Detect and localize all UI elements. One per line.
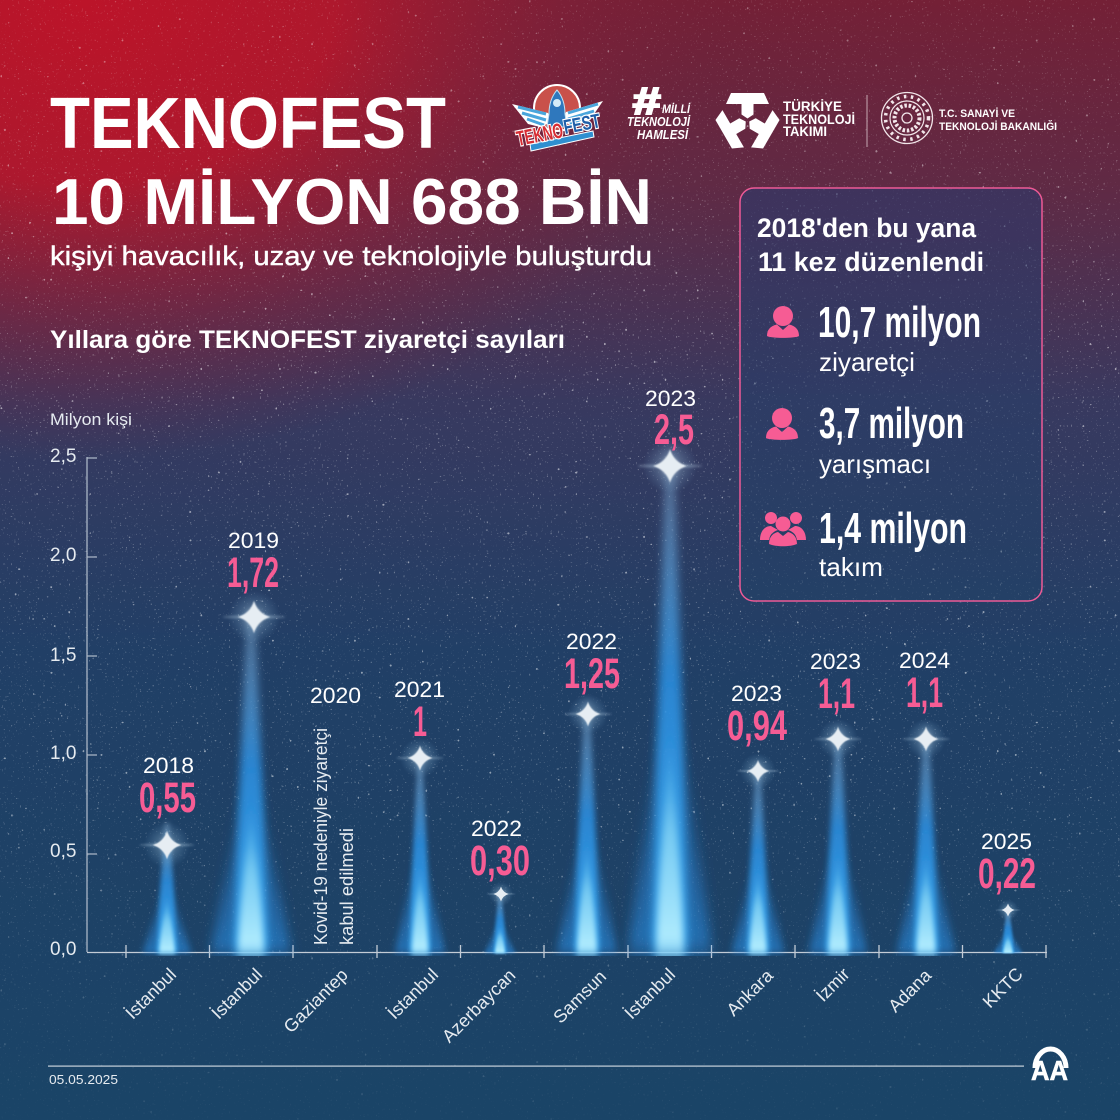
bar 2021 Istanbul 1 [394,677,445,953]
bar 2023 Izmir 1,1: 2023 [810,649,861,674]
logo: Milli Teknoloji Hamlesi: TEKNOLOJİ [627,114,691,129]
bar 2019 Istanbul 1,72: 2019 [228,528,279,553]
x axis [87,945,1047,958]
title: TEKNOFEST [50,84,446,164]
logo: T.C. Sanayi ve Teknoloji Bakanlığı: T.C. SANAYİ VE [939,107,1015,120]
icon: contestant [766,408,798,440]
logo: Milli Teknoloji Hamlesi: HAMLESİ [637,127,689,142]
city labels: İzmir [812,964,854,1006]
icon: team [760,512,806,546]
title [50,84,652,238]
city labels: İstanbul [207,964,266,1023]
y axis: 2,5 [50,446,76,467]
city labels: Samsun [549,966,610,1027]
bar 2022 Azerbaycan 0,30: 2022 [471,816,522,841]
y axis: 1,0 [50,743,76,764]
bar 2019 Istanbul 1,72 [211,528,291,953]
bar 2018 Istanbul 0,55 [139,753,196,953]
bar 2023 Istanbul 2,5: 2,5 [654,406,694,454]
bar 2024 Adana 1,1 [897,648,955,953]
logo: Milli Teknoloji Hamlesi: # [632,81,661,123]
stat: contestants: yarışmacı [819,449,931,479]
logo: Türkiye Teknoloji Takımı: TAKIMI [783,124,827,139]
y axis: 0,0 [50,939,76,960]
city labels: Adana [884,965,936,1016]
bar 2019 Istanbul 1,72: 1,72 [227,549,279,597]
bar 2022 Azerbaycan 0,30: 0,30 [470,837,530,885]
logo: AA: AA [1031,1055,1068,1086]
y axis: 1,5 [50,645,76,666]
subtitle: kişiyi havacılık, uzay ve teknolojiyle buluşturdu [50,241,652,271]
bar 2021 Istanbul 1: 1 [413,698,427,746]
logo divider [866,95,868,147]
city labels: Ankara [723,965,778,1020]
stat: visitors: ziyaretçi [819,347,915,377]
panel heading: 11 kez düzenlendi [758,247,984,277]
y axis: 2,0 [50,545,76,566]
logo: TEKNOFEST: TEKNO [515,119,565,151]
city labels: İstanbul [620,964,679,1023]
city labels: İstanbul [383,964,442,1023]
chart heading: Yıllara göre TEKNOFEST ziyaretçi sayıları [50,326,565,354]
panel: summary [740,188,1042,601]
bar 2020 Gaziantep no visitors [310,683,361,945]
bar 2024 Adana 1,1: 2024 [899,648,950,673]
bar 2023 Istanbul 2,5: 2023 [645,386,696,411]
panel heading: 2018'den bu yana [757,213,977,243]
y axis [50,446,97,960]
bar 2024 Adana 1,1: 1,1 [906,669,943,717]
bar 2018 Istanbul 0,55: 2018 [143,753,194,778]
bar 2018 Istanbul 0,55: 0,55 [139,774,196,822]
logo: T.C. Sanayi ve Teknoloji Bakanlığı: TEKNOLOJİ BAKANLIĞI [939,120,1057,133]
logo: TEKNOFEST [512,85,603,151]
bar 2022 Samsun 1,25 [557,629,620,953]
logo: Türkiye Teknoloji Takımı: TÜRKİYE [783,99,842,114]
stat: teams: takım [819,552,883,582]
stat: visitors: 10,7 milyon [818,298,981,347]
bar 2023 Izmir 1,1: 1,1 [818,670,855,718]
icon: visitor [767,306,799,338]
chart: visitors per year [50,386,1047,1046]
bar 2023 Istanbul 2,5 [628,386,712,953]
y axis unit: Milyon kişi [50,411,132,429]
footer line [48,1066,1024,1067]
bar 2025 KKTC 0,22 [978,829,1036,953]
stat: contestants [819,399,964,479]
bar 2020 Gaziantep no visitors: kabul edilmedi [337,828,357,945]
logo: Milli Teknoloji Hamlesi [627,81,691,142]
bar 2023 Ankara 0,94: 0,94 [727,702,787,750]
bar 2025 KKTC 0,22: 2025 [981,829,1032,854]
stat: teams [819,504,967,582]
city labels: Gaziantep [280,965,352,1037]
logo: Türkiye Teknoloji Takımı: TEKNOLOJİ [783,112,855,127]
bar 2021 Istanbul 1: 2021 [394,677,445,702]
bar 2022 Samsun 1,25: 2022 [566,629,617,654]
city labels [121,964,1027,1046]
logo: T.C. Sanayi ve Teknoloji Bakanlığı [882,92,1057,144]
bar 2022 Samsun 1,25: 1,25 [564,650,620,698]
city labels: İstanbul [121,964,180,1023]
bar 2020 Gaziantep no visitors: Kovid-19 nedeniyle ziyaretçi [311,728,331,945]
title: 10 MİLYON 688 BİN [52,165,652,238]
date: 05.05.2025 [49,1072,118,1087]
bar 2020 Gaziantep no visitors: 2020 [310,683,361,708]
city labels: Azerbaycan [438,965,519,1046]
bar 2023 Ankara 0,94: 2023 [731,681,782,706]
panel heading [757,213,984,277]
logo: TEKNOFEST: FEST [562,110,602,139]
bar 2023 Ankara 0,94 [727,681,787,953]
city labels: KKTC [979,964,1027,1012]
logo: Türkiye Teknoloji Takımı [713,93,855,153]
stat: teams: 1,4 milyon [819,504,967,553]
logo: Milli Teknoloji Hamlesi: MİLLİ [662,101,691,116]
bar 2023 Izmir 1,1 [809,649,867,953]
bar 2025 KKTC 0,22: 0,22 [978,850,1036,898]
stat: visitors [818,298,981,377]
y axis: 0,5 [50,841,76,862]
stat: contestants: 3,7 milyon [819,399,964,448]
bar 2022 Azerbaycan 0,30 [470,816,530,953]
